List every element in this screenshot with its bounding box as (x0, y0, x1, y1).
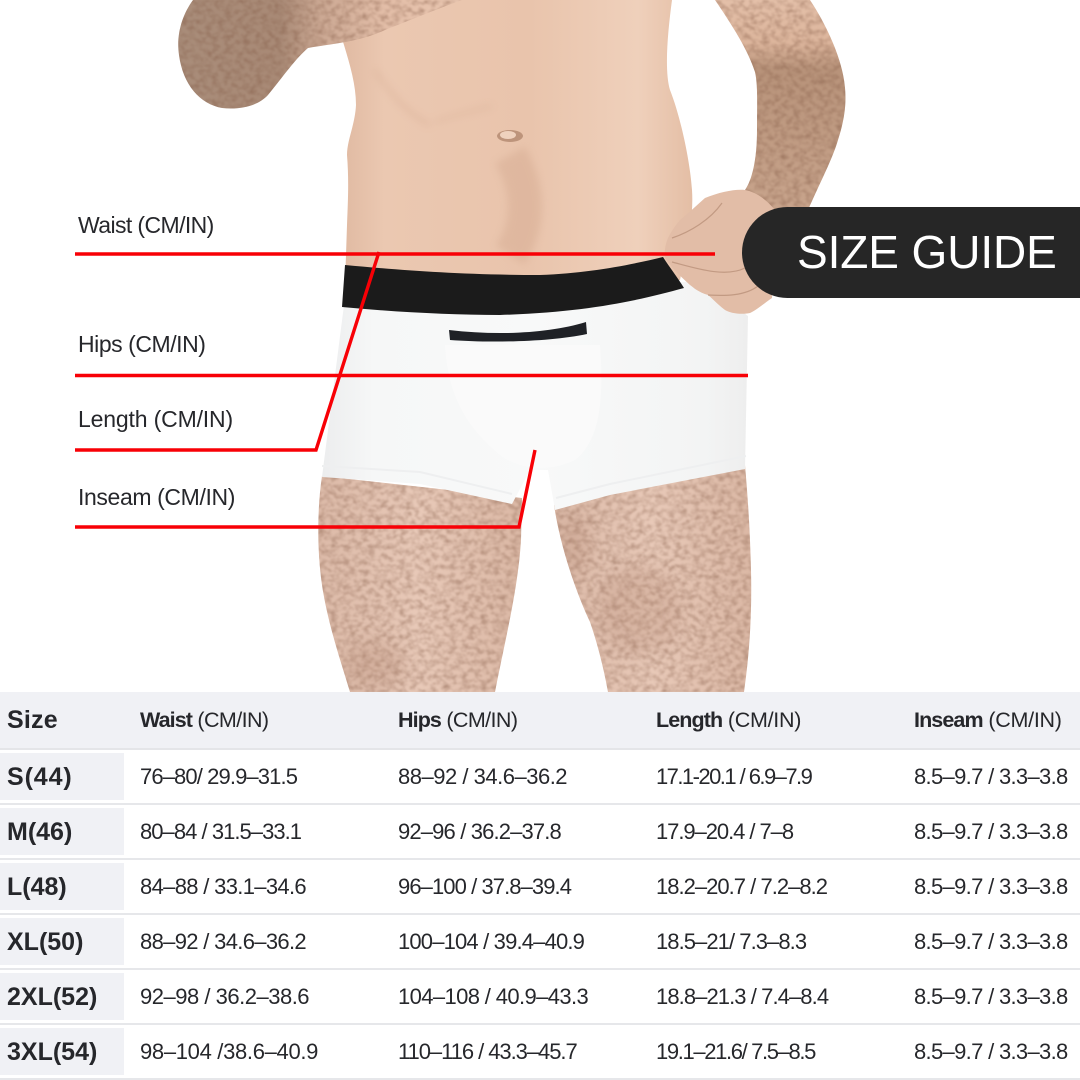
abdominal shading (375, 70, 525, 255)
label: waist: Waist (CM/IN) (78, 212, 214, 238)
badge: size guide (742, 207, 1080, 298)
thigh shading (345, 515, 680, 690)
size table (0, 692, 1080, 1080)
row: L(48): 84–88 / 33.1–34.6 (140, 874, 306, 899)
line: inseam (75, 450, 535, 527)
row: M(46): 80–84 / 31.5–33.1 (140, 819, 301, 844)
row: 3XL(54): 3XL(54) (7, 1038, 97, 1066)
row: 3XL(54): 8.5–9.7 / 3.3–3.8 (914, 1039, 1068, 1064)
hand finger creases (672, 203, 758, 295)
row: L(48) (0, 860, 1080, 915)
photo: model wearing white trunks with red measure lines (75, 0, 846, 692)
label: length: Length (CM/IN) (78, 406, 233, 432)
table header: Waist (CM/IN) (140, 708, 268, 732)
row: 2XL(52): 2XL(52) (7, 983, 97, 1011)
row: XL(50): 18.5–21/ 7.3–8.3 (656, 929, 806, 954)
row: L(48): 96–100 / 37.8–39.4 (398, 874, 571, 899)
trunks body (322, 280, 748, 510)
row: 2XL(52) (0, 970, 1080, 1025)
label: inseam: Inseam (CM/IN) (78, 484, 235, 510)
right leg (554, 465, 751, 692)
row: S(44): 88–92 / 34.6–36.2 (398, 764, 567, 789)
row: S(44): 8.5–9.7 / 3.3–3.8 (914, 764, 1068, 789)
row: 3XL(54): 19.1–21.6/ 7.5–8.5 (656, 1039, 815, 1064)
row: L(48): 8.5–9.7 / 3.3–3.8 (914, 874, 1068, 899)
torso (330, 0, 692, 285)
row: M(46) (0, 805, 1080, 860)
row: 3XL(54): 110–116 / 43.3–45.7 (398, 1039, 577, 1064)
row: S(44): S(44) (7, 763, 73, 791)
table header (0, 692, 1080, 750)
row: M(46): 8.5–9.7 / 3.3–3.8 (914, 819, 1068, 844)
label: hips: Hips (CM/IN) (78, 331, 205, 357)
row: M(46): 92–96 / 36.2–37.8 (398, 819, 561, 844)
row: XL(50) (0, 915, 1080, 970)
row: XL(50): 8.5–9.7 / 3.3–3.8 (914, 929, 1068, 954)
row: XL(50): 100–104 / 39.4–40.9 (398, 929, 584, 954)
row: S(44): 76–80/ 29.9–31.5 (140, 764, 297, 789)
row: 2XL(52): 8.5–9.7 / 3.3–3.8 (914, 984, 1068, 1009)
row: 3XL(54): 98–104 /38.6–40.9 (140, 1039, 318, 1064)
row: M(46): M(46) (7, 818, 72, 846)
row: XL(50): 88–92 / 34.6–36.2 (140, 929, 306, 954)
right forearm (715, 0, 845, 215)
badge: size guide: SIZE GUIDE (797, 226, 1057, 278)
left leg (318, 476, 522, 692)
right hand (665, 190, 775, 314)
row: L(48): 18.2–20.7 / 7.2–8.2 (656, 874, 827, 899)
row: S(44) (0, 750, 1080, 805)
row: 2XL(52): 104–108 / 40.9–43.3 (398, 984, 588, 1009)
table header: Inseam (CM/IN) (914, 708, 1062, 732)
trunks hem (322, 456, 746, 498)
row: L(48): L(48) (7, 873, 67, 901)
pocket zip (449, 322, 587, 342)
measure lines (75, 252, 748, 527)
line: length (75, 252, 379, 450)
line: waist (75, 252, 715, 256)
row: 3XL(54) (0, 1025, 1080, 1080)
trunks pouch shading (445, 345, 601, 468)
navel (497, 130, 523, 142)
left forearm and hand (178, 0, 462, 108)
row: M(46): 17.9–20.4 / 7–8 (656, 819, 793, 844)
table header: Length (CM/IN) (656, 708, 801, 732)
row: 2XL(52): 92–98 / 36.2–38.6 (140, 984, 309, 1009)
table header: Hips (CM/IN) (398, 708, 517, 732)
line: hips (75, 374, 748, 377)
waistband (342, 257, 684, 315)
row: 2XL(52): 18.8–21.3 / 7.4–8.4 (656, 984, 828, 1009)
table header: Size (7, 706, 58, 734)
row: S(44): 17.1-20.1 / 6.9–7.9 (656, 764, 811, 789)
row: XL(50): XL(50) (7, 928, 83, 956)
